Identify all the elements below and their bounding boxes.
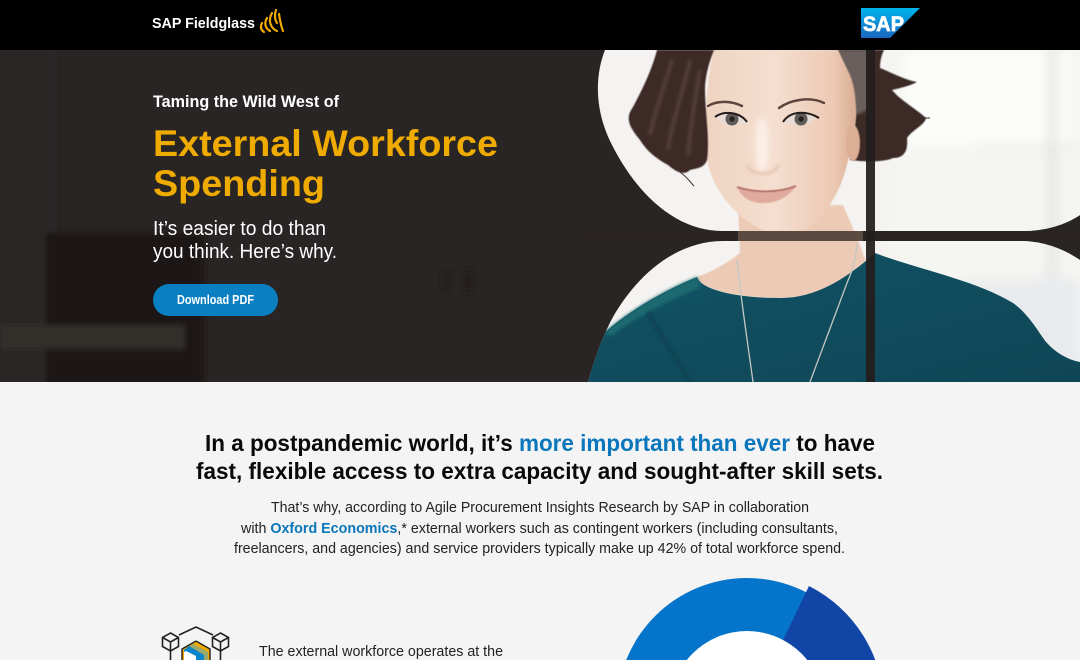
blurred window: [913, 58, 1080, 360]
overlay bar: horizontal: [738, 231, 863, 241]
logo: SAP Fieldglass: SAP Fieldglass: [152, 15, 255, 32]
hair back: right: [838, 50, 926, 161]
blurred office background: [2, 230, 470, 382]
mouth: [737, 186, 796, 203]
donut chart: [617, 578, 884, 660]
header bar: [0, 0, 1080, 50]
hero subtitle: Taming the Wild West of: [153, 93, 339, 111]
intro paragraph: freelancers, and agencies) and service providers typically make up 42% of total workforce spend.: [234, 540, 845, 557]
download button: [153, 284, 278, 316]
logo: SAP: [861, 8, 920, 38]
ear: [846, 125, 860, 161]
section heading: In a postpandemic world, it’s more important than ever to have: [205, 430, 875, 456]
neck: [697, 205, 866, 298]
shirt: [586, 253, 1080, 382]
logo: SAP: SAP: [863, 13, 904, 36]
body text: external workforce: The external workforce operates at the: [259, 643, 503, 660]
eyes: [715, 112, 819, 126]
hero tagline: It’s easier to do than: [153, 218, 326, 240]
eyebrows: [708, 99, 824, 108]
logo: SAP Fieldglass: [152, 10, 283, 32]
hair grey band: [836, 50, 868, 115]
hero tagline: [153, 218, 337, 263]
hero heading: Spending: [153, 163, 325, 204]
hair highlights: [650, 60, 700, 155]
hair strands: [680, 118, 930, 186]
icon: network cube: [162, 627, 228, 660]
nose: [755, 117, 769, 173]
hero heading: [153, 123, 498, 204]
hair front: left: [629, 50, 714, 173]
photo: woman portrait: [580, 40, 1080, 390]
hero tagline: you think. Here’s why.: [153, 241, 337, 263]
section heading: [196, 430, 883, 484]
intro paragraph: That’s why, according to Agile Procurement Insights Research by SAP in collaboration: [271, 499, 809, 516]
hero panel: [0, 40, 1080, 390]
hero heading: External Workforce: [153, 123, 498, 164]
intro paragraph: with Oxford Economics,* external workers such as contingent workers (including consultants,: [240, 520, 838, 537]
download button: Download PDF: [177, 292, 254, 307]
face: [706, 50, 856, 232]
overlay bar: vertical: [866, 50, 875, 382]
section heading: fast, flexible access to extra capacity and sought-after skill sets.: [196, 458, 883, 484]
necklace: [737, 243, 857, 382]
intro paragraph: [234, 499, 845, 557]
